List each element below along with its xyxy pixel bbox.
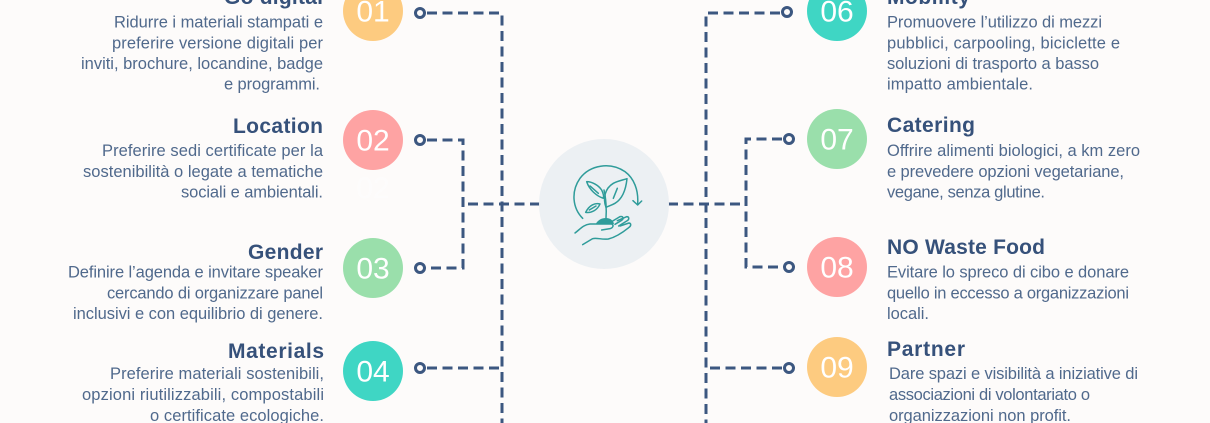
item 04: Materials: 04 bbox=[356, 356, 390, 388]
item 07: Catering: Offrire alimenti biologici, a km zero bbox=[887, 142, 1140, 160]
item 07: Catering: e prevedere opzioni vegetariane, bbox=[887, 163, 1124, 181]
item 09: Partner: Partner bbox=[887, 338, 965, 361]
item 08: NO Waste Food: quello in eccesso a organizzazioni bbox=[887, 284, 1129, 302]
item 09: Partner: 09 bbox=[820, 352, 854, 384]
central icon: plant in hand bbox=[539, 139, 669, 269]
item 03: Gender: cercando di organizzare panel bbox=[107, 284, 323, 302]
item 01: Go digital: Ridurre i materiali stampati e bbox=[114, 14, 323, 32]
item 08: NO Waste Food: Evitare lo spreco di cibo e donare bbox=[887, 264, 1129, 282]
item 02: Location: 02 bbox=[356, 124, 390, 158]
item 06: Mobility: impatto ambientale. bbox=[887, 76, 1033, 94]
item 02: Location: sociali e ambientali. bbox=[181, 184, 323, 202]
item 03: Gender: 03 bbox=[356, 252, 390, 286]
item 09: Partner: Dare spazi e visibilità a iniziative di bbox=[889, 365, 1138, 383]
item 01: Go digital: e programmi. bbox=[224, 76, 320, 94]
item 02: Location bbox=[83, 110, 403, 205]
item 02: Location: Location bbox=[233, 115, 323, 138]
item 06: Mobility: soluzioni di trasporto a basso bbox=[887, 55, 1099, 73]
item 02: Location: Preferire sedi certificate per la bbox=[102, 142, 324, 160]
item 08: NO Waste Food: 08 bbox=[820, 252, 854, 284]
item 03: Gender bbox=[68, 238, 403, 323]
item 03: Gender: inclusivi e con equilibrio di genere. bbox=[73, 305, 323, 323]
item 04: Materials: Materials bbox=[228, 340, 324, 363]
item 04: Materials: opzioni riutilizzabili, compostabili bbox=[82, 386, 324, 404]
item 03: Gender: Gender bbox=[248, 241, 323, 264]
item 08: NO Waste Food bbox=[807, 236, 1129, 323]
item 04: Materials bbox=[82, 340, 403, 423]
item 06: Mobility: Promuovere l’utilizzo di mezzi bbox=[887, 14, 1102, 32]
connector lines bbox=[416, 8, 794, 423]
item 06: Mobility bbox=[807, 0, 1120, 94]
item 01: Go digital bbox=[81, 0, 403, 94]
item 02: Location: 02 bbox=[356, 172, 390, 205]
item 01: Go digital: preferire versione digitali per bbox=[112, 34, 324, 52]
item 02: Location: sostenibilità o legate a tematiche bbox=[83, 163, 323, 181]
item 01: Go digital: inviti, brochure, locandine, badge bbox=[81, 55, 323, 73]
item 07: Catering: vegane, senza glutine. bbox=[887, 184, 1045, 202]
item 07: Catering: Catering bbox=[887, 114, 975, 137]
item 08: NO Waste Food: NO Waste Food bbox=[887, 236, 1045, 259]
item 08: NO Waste Food: locali. bbox=[887, 305, 929, 323]
item 09: Partner bbox=[807, 337, 1138, 423]
item 03: Gender: Definire l’agenda e invitare speaker bbox=[68, 264, 324, 282]
item 09: Partner: associazioni di volontariato o bbox=[889, 386, 1090, 404]
item 04: Materials: Preferire materiali sostenibili, bbox=[110, 365, 324, 383]
item 06: Mobility: pubblici, carpooling, biciclette e bbox=[887, 34, 1120, 52]
item 07: Catering: 07 bbox=[820, 124, 854, 156]
item 07: Catering bbox=[807, 109, 1140, 202]
